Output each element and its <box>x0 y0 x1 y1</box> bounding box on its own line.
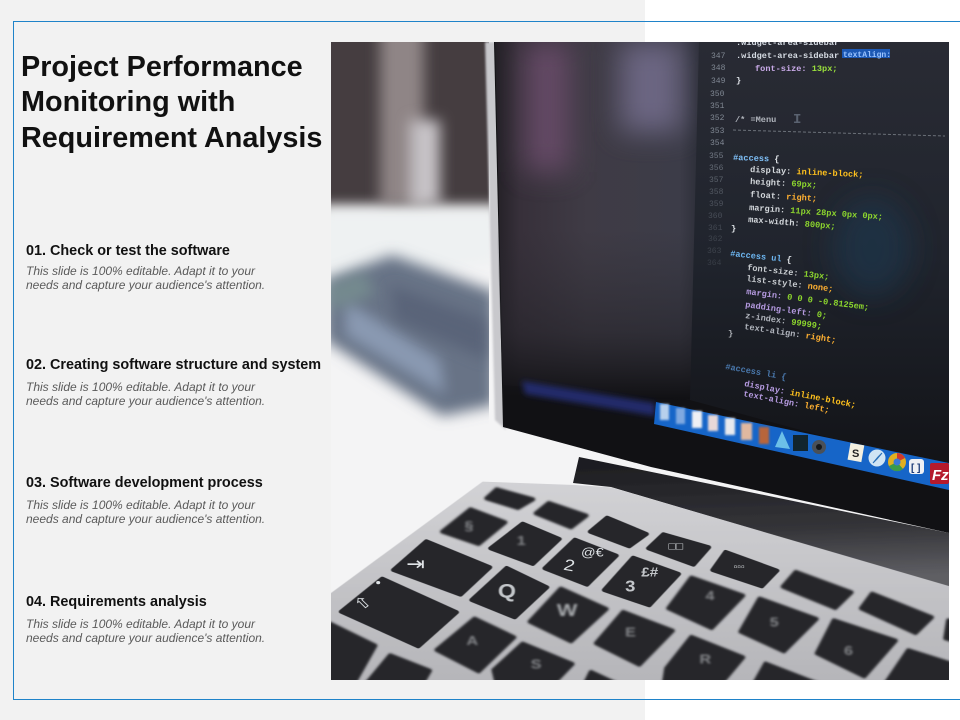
code text: float: right; <box>750 190 817 204</box>
code text: display: inline-block; <box>743 379 857 411</box>
laptop lid edge <box>485 42 506 430</box>
code text: display: inline-block; <box>750 165 864 180</box>
key legends: □□ <box>669 541 683 552</box>
key legends: 2 <box>562 556 577 575</box>
code text: } <box>736 76 741 86</box>
photo: laptop with code on screen <box>331 42 949 680</box>
code text: text-align: right; <box>744 322 837 346</box>
code text: 350 <box>710 90 725 99</box>
key legends: 1 <box>517 534 526 549</box>
code text: textAlign: <box>843 51 891 60</box>
item 04: requirements analysis: This slide is 100% editable. Adapt it to your <box>26 617 255 631</box>
code text: } <box>728 329 733 339</box>
code text <box>707 38 945 416</box>
key legends: A <box>467 634 479 649</box>
item 04: requirements analysis: 04. Requirements analysis <box>26 594 207 610</box>
key legends: W <box>557 601 578 620</box>
code text: 364 <box>707 259 722 268</box>
code text: 361 <box>708 224 723 233</box>
key legends: £# <box>641 565 658 579</box>
hinge <box>573 457 949 587</box>
key legends: E <box>625 626 636 640</box>
key legends: § <box>465 519 473 534</box>
code text: I <box>793 112 801 128</box>
key legends: 5 <box>770 616 779 630</box>
laptop screen <box>494 42 949 533</box>
item 04: requirements analysis: needs and capture your audience's attention. <box>26 631 265 645</box>
code text: max-width: 800px; <box>748 215 836 232</box>
code text: padding-left: 0; <box>745 300 828 321</box>
code text: 351 <box>710 102 725 111</box>
code text: margin: 11px 28px 0px 0px; <box>749 203 883 222</box>
key legends: S <box>531 657 542 672</box>
key legends: Q <box>498 580 516 602</box>
title: Monitoring with <box>21 86 235 118</box>
item 03: development process <box>26 475 265 526</box>
dock: Fz <box>932 467 949 484</box>
key legends: @€ <box>581 546 604 559</box>
code text: list-style: none; <box>746 274 834 295</box>
dock <box>654 402 949 490</box>
key legends: ⇧ <box>350 592 376 614</box>
code text: 349 <box>711 77 726 86</box>
code text: 355 <box>709 152 724 161</box>
title: Requirement Analysis <box>21 122 322 154</box>
key legends <box>350 519 853 672</box>
code text: margin: 0 0 0 -0.8125em; <box>746 287 870 313</box>
code text: 347 <box>711 52 726 61</box>
code text: height: 69px; <box>750 177 817 191</box>
code text: z-index: 99999; <box>745 311 823 332</box>
dock: [ ] <box>911 463 920 474</box>
code text: 353 <box>710 127 725 136</box>
keyboard keys <box>330 489 956 690</box>
code text: text-align: left; <box>742 389 830 416</box>
item 02: software structure: needs and capture your audience's attention. <box>26 394 265 408</box>
item 03: development process: This slide is 100% editable. Adapt it to your <box>26 498 255 512</box>
code text: 359 <box>709 200 724 209</box>
code text: 354 <box>710 139 725 148</box>
code text: #access ul { <box>730 249 792 265</box>
code text: #access li { <box>724 362 787 383</box>
code text: 360 <box>708 212 723 221</box>
item 02: software structure: This slide is 100% editable. Adapt it to your <box>26 380 255 394</box>
code text: 348 <box>711 64 726 73</box>
key legends: 6 <box>844 644 853 659</box>
code text: /* =Menu <box>735 115 776 125</box>
code text: font-size: 13px; <box>755 64 838 74</box>
code text: 356 <box>709 164 724 173</box>
key legends: 4 <box>705 589 715 604</box>
item 02: software structure: 02. Creating software structure and system <box>26 357 321 373</box>
item 03: development process: 03. Software development process <box>26 475 263 491</box>
key legends: ▫▫▫ <box>734 562 745 572</box>
code text: 357 <box>709 176 724 185</box>
code text: 352 <box>710 114 725 123</box>
item 01: check or test: needs and capture your audience's attention. <box>26 278 265 292</box>
item 04: requirements analysis <box>26 594 265 645</box>
key legends: R <box>699 652 711 667</box>
title: Project Performance <box>21 51 303 83</box>
keyboard base <box>326 482 956 690</box>
key legends: ⇥ <box>406 554 425 574</box>
item 01: check or test: 01. Check or test the software <box>26 243 230 259</box>
code text: 362 <box>708 235 723 244</box>
dock: S <box>852 448 859 460</box>
code text: } <box>731 224 736 234</box>
item 02: software structure <box>26 357 321 408</box>
code text: 358 <box>709 188 724 197</box>
code text: #access { <box>733 153 780 165</box>
item 01: check or test <box>26 243 265 292</box>
table background <box>331 42 949 680</box>
title <box>21 51 322 154</box>
code text: .widget-area-sidebar <box>736 51 839 61</box>
code text: 363 <box>707 247 722 256</box>
blurred background objects <box>331 42 489 424</box>
key legends: 3 <box>625 578 635 595</box>
code text: font-size: 13px; <box>747 263 830 282</box>
item 01: check or test: This slide is 100% editable. Adapt it to your <box>26 264 255 278</box>
item 03: development process: needs and capture your audience's attention. <box>26 512 265 526</box>
